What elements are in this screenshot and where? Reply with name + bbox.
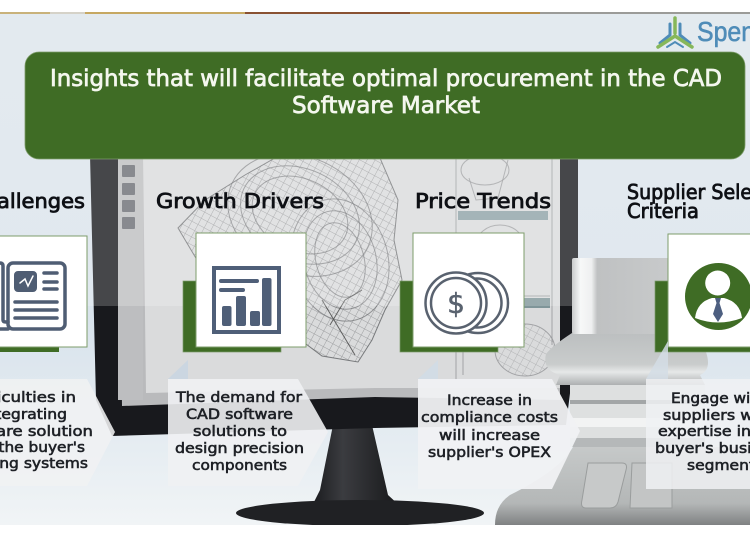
wireframe part drawing — [178, 131, 402, 362]
callout: challenges — [0, 379, 115, 486]
title banner — [25, 52, 745, 159]
icon: coins: $ — [447, 287, 465, 320]
panel: challenges — [0, 189, 115, 486]
title text — [50, 64, 722, 119]
card: growth drivers — [183, 233, 306, 352]
callout text: growth drivers — [175, 390, 304, 474]
callout: supplier selection — [646, 379, 750, 489]
chess-piece: collar — [545, 333, 708, 385]
icon: report chart — [214, 268, 279, 332]
title text: Software Market — [292, 91, 480, 119]
callout text: supplier selection — [655, 391, 750, 474]
card: price trends — [400, 233, 524, 352]
heading: growth drivers: Growth Drivers — [156, 189, 324, 213]
card: challenges — [0, 236, 87, 352]
heading: price trends: Price Trends — [415, 189, 551, 213]
monitor bezel — [90, 155, 578, 436]
fold triangle — [646, 341, 668, 379]
drawing views panel — [456, 155, 555, 380]
callout text: price trends: Increase in — [447, 393, 532, 409]
callout text: challenges — [0, 390, 93, 472]
monitor screen — [118, 155, 560, 406]
callout text: growth drivers: The demand for — [175, 390, 302, 406]
callout text: supplier selection: segment — [687, 458, 750, 474]
panel: supplier selection criteria — [627, 180, 750, 489]
card: supplier selection — [655, 234, 750, 352]
chess-piece: cylinder — [572, 258, 712, 334]
callout text: price trends — [421, 393, 558, 461]
callout text: price trends: will increase — [439, 428, 540, 444]
monitor stand — [312, 425, 400, 506]
top photo strip — [0, 12, 750, 14]
callout: growth drivers — [168, 379, 328, 486]
heading: supplier selection criteria — [627, 180, 750, 223]
icon: newspaper — [0, 263, 65, 329]
callout text: price trends: compliance costs — [421, 410, 558, 426]
callout text: growth drivers: CAD software — [186, 407, 293, 423]
fold triangle — [168, 360, 188, 379]
callout text: growth drivers: components — [192, 458, 287, 474]
heading: supplier selection criteria: Criteria — [627, 199, 699, 223]
logo mark — [658, 18, 692, 47]
callout text: growth drivers: solutions to — [193, 424, 287, 440]
callout text: growth drivers: design precision — [175, 441, 304, 457]
chess-piece: base — [495, 447, 750, 525]
project label strip — [458, 211, 548, 220]
brightness overlay on upper photo — [0, 14, 750, 306]
fold triangle — [418, 360, 438, 379]
icon: person with tie — [685, 263, 750, 330]
callout text: price trends: supplier's OPEX — [428, 445, 551, 461]
toolbar — [118, 155, 143, 400]
panel: growth drivers — [156, 189, 328, 486]
logo — [658, 16, 750, 47]
title text: Insights that will facilitate optimal procurement in the CAD — [50, 64, 722, 92]
chess-piece: neck — [570, 385, 705, 447]
panel: price trends — [400, 189, 580, 489]
monitor foot — [236, 500, 484, 526]
callout: price trends — [418, 379, 580, 489]
screen inner area — [143, 155, 560, 393]
